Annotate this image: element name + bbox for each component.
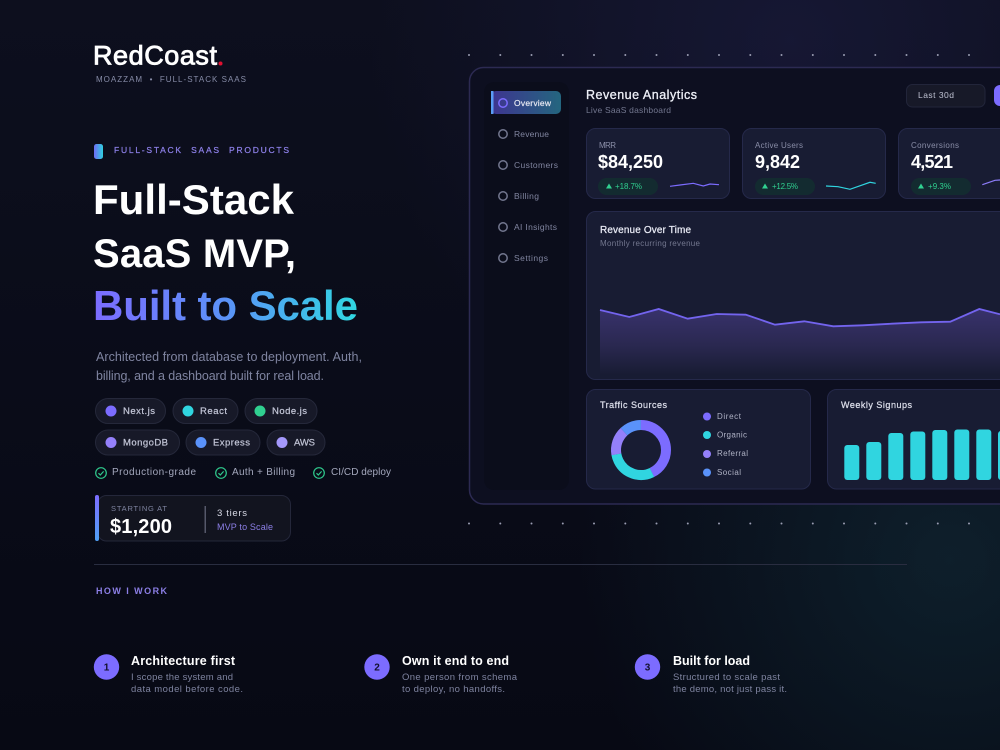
legend: Organic: [717, 430, 747, 440]
step 3: Built for load: [673, 654, 750, 668]
traffic sources card: Traffic Sources: [600, 400, 668, 410]
chip: Next.js: [96, 398, 166, 424]
logo: RedCoast: [93, 40, 217, 70]
headline: [93, 176, 358, 329]
step 2: One person from schema: [402, 672, 518, 683]
step 3: Structured to scale past: [673, 672, 780, 683]
action button: [994, 85, 1000, 106]
chip: React: React: [200, 406, 227, 417]
dashboard title: [586, 88, 697, 115]
sidebar: Settings: [514, 253, 548, 263]
nav active: Overview: [491, 91, 561, 114]
dashboard panel: [470, 68, 1000, 504]
step 2: [364, 654, 518, 695]
logo subtitle: MOAZZAM • FULL-STACK SAAS: [96, 75, 246, 84]
headline: SaaS MVP,: [93, 232, 296, 276]
step 2: to deploy, no handoffs.: [402, 684, 505, 695]
price label: STARTING AT: [111, 504, 167, 513]
chip: MongoDB: [96, 430, 180, 455]
chip: Next.js: Next.js: [123, 406, 155, 417]
check: CI/CD deploy: CI/CD deploy: [331, 467, 391, 478]
step 1: I scope the system and: [131, 672, 233, 683]
step 3: the demo, not just pass it.: [673, 684, 787, 695]
chip: Node.js: [245, 398, 317, 424]
eyebrow: FULL-STACK SAAS PRODUCTS: [114, 145, 289, 155]
stat card: MRR: [586, 128, 730, 198]
sidebar: Customers: [514, 160, 558, 170]
chip: Node.js: Node.js: [272, 406, 307, 417]
weekly signups card: Weekly Signups: [841, 400, 912, 410]
check: Auth + Billing: Auth + Billing: [232, 467, 295, 478]
tiers: 3 tiers: [217, 508, 247, 519]
weekly signups card: [828, 390, 1000, 489]
chip: MongoDB: MongoDB: [123, 438, 168, 448]
eyebrow marker: [94, 144, 103, 159]
revenue chart card: Monthly recurring revenue: [600, 239, 701, 248]
step 2: 2: [374, 662, 380, 674]
feature checks: [96, 467, 391, 478]
bar chart: [844, 430, 1000, 480]
stat card: MRR: $84,250: [598, 152, 663, 172]
description: [96, 350, 362, 383]
revenue chart card: Revenue Over Time: [600, 225, 691, 236]
sidebar: AI Insights: [514, 222, 557, 232]
revenue chart card: [586, 212, 1000, 380]
stat card: Conversions: 4,521: [911, 152, 953, 172]
dashboard title: Revenue Analytics: [586, 88, 697, 102]
stat card: Active Users: +12.5%: [772, 182, 798, 191]
date filter: [906, 84, 985, 107]
chip: AWS: [267, 430, 325, 455]
description: Architected from database to deployment. Auth,: [96, 350, 362, 364]
legend: Direct: [717, 412, 742, 421]
dashboard title: Live SaaS dashboard: [586, 105, 671, 115]
chip: AWS: AWS: [294, 438, 315, 448]
step 2: Own it end to end: [402, 654, 509, 668]
chip: Express: [186, 430, 260, 455]
stat card: Conversions: Conversions: [911, 141, 959, 150]
step 1: Architecture first: [131, 654, 236, 668]
chip: Express: Express: [213, 438, 250, 448]
area chart: [600, 309, 1000, 375]
step 3: 3: [645, 662, 651, 674]
chip: React: [173, 398, 238, 424]
step 1: data model before code.: [131, 684, 243, 695]
how I work heading: HOW I WORK: [96, 586, 168, 596]
legend: [703, 412, 748, 477]
donut chart: [606, 415, 676, 485]
description: billing, and a dashboard built for real load.: [96, 369, 324, 383]
tiers: [217, 508, 273, 532]
nav items: [499, 130, 507, 262]
step 1: [94, 654, 243, 695]
tech chips: [96, 398, 325, 455]
nav active: Overview: Overview: [514, 98, 552, 108]
stat card: MRR: +18.7%: [615, 182, 642, 191]
sidebar: [484, 82, 569, 490]
stat card: Conversions: [898, 128, 1000, 198]
stat card: Conversions: +9.3%: [928, 182, 951, 191]
step 1: 1: [104, 662, 110, 674]
date filter: Last 30d: [918, 90, 954, 100]
headline: Full-Stack: [93, 176, 295, 223]
check: Production-grade: Production-grade: [112, 467, 196, 478]
legend: Social: [717, 468, 741, 477]
stat card: MRR: MRR: [599, 141, 616, 150]
pricing card: [95, 495, 290, 541]
step 3: [635, 654, 787, 695]
stat card: Active Users: Active Users: [755, 141, 803, 150]
sidebar: Billing: [514, 191, 539, 201]
stat card: Active Users: 9,842: [755, 152, 800, 172]
tiers: MVP to Scale: [217, 522, 273, 532]
headline: Built to Scale: [93, 282, 358, 329]
traffic sources card: [586, 390, 810, 489]
price: $1,200: [110, 516, 172, 538]
sidebar: Revenue: [514, 129, 549, 139]
stat card: Active Users: [742, 128, 886, 198]
legend: Referral: [717, 449, 748, 458]
